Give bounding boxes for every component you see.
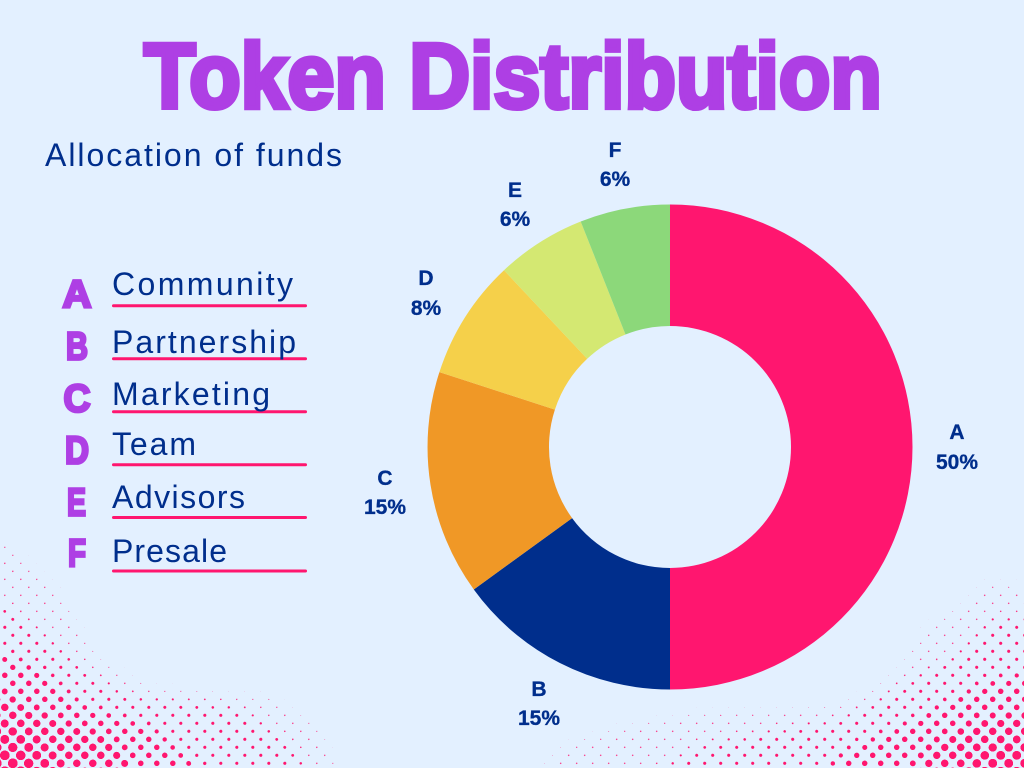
- label E 6%: 6%: [500, 208, 530, 231]
- label D 8%: 8%: [411, 297, 441, 320]
- chart labels: [364, 139, 978, 730]
- donut chart: [428, 204, 913, 689]
- halftone dots: bottom right corner: [500, 560, 1024, 768]
- label B 15%: B: [531, 678, 547, 701]
- segment A 50%: [670, 204, 913, 690]
- legend item F: Presale: Presale: [112, 533, 227, 569]
- label C 15%: C: [377, 467, 393, 490]
- legend item C: Marketing: Marketing: [112, 376, 270, 412]
- legend item B: Partnership: B: [66, 326, 88, 368]
- title: Token Distribution: [144, 24, 882, 127]
- legend item B: Partnership: Partnership: [112, 324, 296, 360]
- label A 50%: [936, 421, 978, 474]
- segment E 6%: [504, 222, 626, 359]
- subtitle: Allocation of funds: [45, 137, 342, 173]
- label E 6%: [500, 179, 530, 231]
- label C 15%: 15%: [364, 496, 406, 519]
- legend item A: Community: A: [62, 274, 92, 316]
- label F 6%: F: [609, 139, 622, 162]
- label F 6%: 6%: [600, 168, 630, 191]
- label D 8%: [411, 267, 441, 320]
- legend item A: Community: Community: [112, 266, 293, 302]
- legend item E: Advisors: E: [67, 482, 86, 524]
- label A 50%: 50%: [936, 451, 978, 474]
- halftone dots: bottom left corner: [0, 500, 360, 768]
- segment C 15%: [428, 372, 572, 590]
- legend item A: Community: [62, 266, 307, 316]
- legend item C: Marketing: C: [64, 378, 90, 420]
- segment D 8%: [439, 270, 587, 410]
- label C 15%: [364, 467, 406, 519]
- label F 6%: [600, 139, 630, 191]
- legend: [62, 266, 307, 576]
- legend item D: Team: [65, 426, 307, 472]
- segment F 6%: [581, 204, 670, 334]
- label B 15%: 15%: [518, 707, 560, 730]
- label E 6%: E: [508, 179, 522, 202]
- legend item D: Team: D: [65, 430, 89, 472]
- label D 8%: D: [418, 267, 434, 290]
- label B 15%: [518, 678, 560, 730]
- legend item D: Team: Team: [112, 426, 196, 462]
- label A 50%: A: [949, 421, 965, 444]
- legend item E: Advisors: Advisors: [112, 479, 245, 515]
- legend item E: Advisors: [67, 479, 307, 524]
- legend item F: Presale: F: [68, 532, 86, 576]
- legend item B: Partnership: [66, 324, 307, 368]
- legend item C: Marketing: [64, 376, 307, 420]
- segment B 15%: [474, 518, 670, 690]
- legend item F: Presale: [68, 532, 307, 576]
